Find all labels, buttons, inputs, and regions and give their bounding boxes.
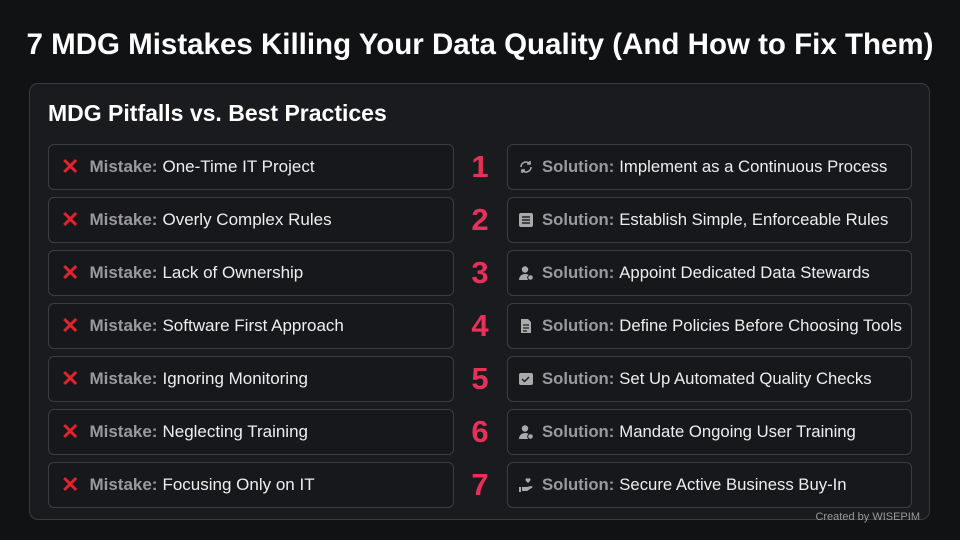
solution 5 [507, 356, 912, 402]
solution 5: Solution: [542, 369, 614, 388]
solution 4 [507, 303, 912, 349]
mistake 4 [48, 303, 454, 349]
solution 6: Mandate Ongoing User Training [619, 422, 856, 441]
solution 1: Implement as a Continuous Process [619, 157, 887, 176]
mistake 4: Mistake: [89, 316, 157, 335]
solution 2 [507, 197, 912, 243]
title: 7 MDG Mistakes Killing Your Data Quality (And How to Fix Them) [27, 28, 933, 61]
number 5: 5 [471, 361, 489, 396]
number 7: 7 [471, 467, 489, 502]
solution 1 [507, 144, 912, 190]
solution 7 [507, 462, 912, 508]
mistake 6: ✕ [61, 419, 79, 444]
solution 1: Solution: [542, 157, 614, 176]
mistake 4: ✕ [61, 313, 79, 338]
mistake 5 [48, 356, 454, 402]
number 2: 2 [471, 202, 489, 237]
mistake 7 [48, 462, 454, 508]
number 4: 4 [471, 308, 489, 343]
mistake 7: Mistake: [89, 475, 157, 494]
solution 5: Set Up Automated Quality Checks [619, 369, 872, 388]
mistake 6: Neglecting Training [162, 422, 308, 441]
number 3: 3 [471, 255, 489, 290]
solution 2: Establish Simple, Enforceable Rules [619, 210, 888, 229]
solution 7: Solution: [542, 475, 614, 494]
number 6: 6 [471, 414, 489, 449]
mistake 1: One-Time IT Project [162, 157, 315, 176]
mistake 1 [48, 144, 454, 190]
solution 2: Solution: [542, 210, 614, 229]
solution 4: Solution: [542, 316, 614, 335]
mistake 5: Mistake: [89, 369, 157, 388]
mistake 5: Ignoring Monitoring [162, 369, 308, 388]
solution 3 [507, 250, 912, 296]
mistake 3: Lack of Ownership [162, 263, 303, 282]
mistake 3: ✕ [61, 260, 79, 285]
mistake 2: Overly Complex Rules [162, 210, 332, 229]
mistake 2 [48, 197, 454, 243]
mistake 2: ✕ [61, 207, 79, 232]
mistake 6 [48, 409, 454, 455]
mistake 5: ✕ [61, 366, 79, 391]
solution 3: Solution: [542, 263, 614, 282]
solution 6: Solution: [542, 422, 614, 441]
mistake 7: Focusing Only on IT [162, 475, 315, 494]
mistake 3 [48, 250, 454, 296]
solution 7: Secure Active Business Buy-In [619, 475, 847, 494]
mistake 3: Mistake: [89, 263, 157, 282]
solution 4: Define Policies Before Choosing Tools [619, 316, 902, 335]
solution 3: Appoint Dedicated Data Stewards [619, 263, 870, 282]
number 1: 1 [471, 149, 489, 184]
mistake 2: Mistake: [89, 210, 157, 229]
panel: comparison [29, 83, 930, 520]
mistake 1: Mistake: [89, 157, 157, 176]
mistake 1: ✕ [61, 154, 79, 179]
credit: Created by WISEPIM [815, 511, 920, 523]
mistake 7: ✕ [61, 472, 79, 497]
heading: MDG Pitfalls vs. Best Practices [48, 100, 387, 126]
mistake 4: Software First Approach [162, 316, 344, 335]
mistake 6: Mistake: [89, 422, 157, 441]
solution 6 [507, 409, 912, 455]
